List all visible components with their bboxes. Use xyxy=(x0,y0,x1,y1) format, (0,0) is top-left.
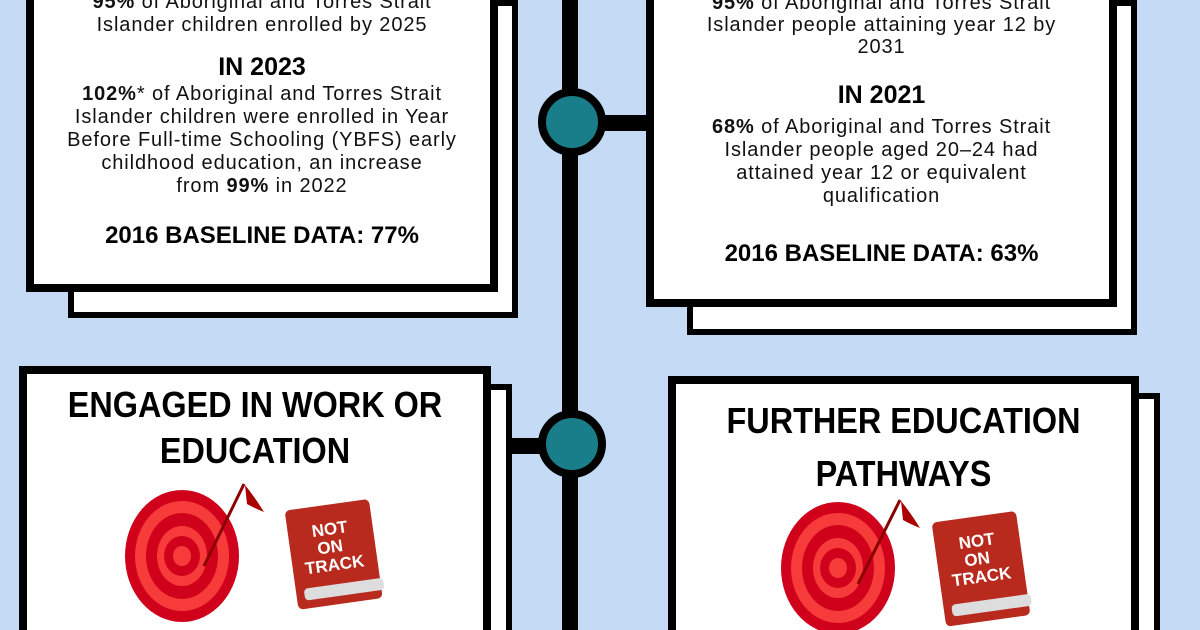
progress text: Islander children were enrolled in Year xyxy=(75,106,449,128)
panel: early childhood enrolment xyxy=(26,0,518,318)
heading: FURTHER EDUCATION xyxy=(727,400,1080,441)
panel: year 12 attainment xyxy=(646,0,1137,335)
panel: engaged in work or education xyxy=(19,366,512,630)
baseline: 2016 BASELINE DATA: 77% xyxy=(105,222,419,249)
progress text: 102%* of Aboriginal and Torres Strait xyxy=(82,83,442,105)
icon: not on track book: NOT xyxy=(958,529,996,553)
connector: top right xyxy=(590,115,660,131)
heading: in 2023: IN 2023 xyxy=(218,53,306,81)
panel: further education pathways xyxy=(668,376,1160,630)
heading: PATHWAYS xyxy=(816,453,991,494)
target text: 2031 xyxy=(857,36,906,58)
progress text: childhood education, an increase xyxy=(101,152,423,174)
icon: not on track book: TRACK xyxy=(951,563,1013,590)
baseline: 2016 BASELINE DATA: 63% xyxy=(725,240,1038,267)
node: top xyxy=(538,88,606,156)
icon: target xyxy=(125,483,264,622)
node: bottom xyxy=(538,410,606,478)
progress text xyxy=(712,116,1051,207)
heading: in 2021: IN 2021 xyxy=(838,81,925,109)
heading xyxy=(727,400,1080,494)
progress text: qualification xyxy=(823,185,940,207)
icon: not on track book: ON xyxy=(963,548,991,570)
timeline vertical line xyxy=(562,0,578,630)
target text: Islander children enrolled by 2025 xyxy=(97,14,427,36)
progress text: Islander people aged 20–24 had xyxy=(725,139,1038,161)
heading xyxy=(68,384,442,471)
icon: not on track book: NOT xyxy=(311,517,349,541)
progress text xyxy=(67,83,457,197)
heading: EDUCATION xyxy=(160,430,350,471)
progress text: 68% of Aboriginal and Torres Strait xyxy=(712,116,1051,138)
icon: target xyxy=(781,499,920,630)
progress text: Before Full-time Schooling (YBFS) early xyxy=(67,129,457,151)
icon: not on track book xyxy=(285,500,384,610)
icon: not on track book: ON xyxy=(316,536,344,558)
progress text: attained year 12 or equivalent xyxy=(736,162,1027,184)
target text xyxy=(92,0,432,36)
icon: not on track book: TRACK xyxy=(304,551,366,578)
heading: ENGAGED IN WORK OR xyxy=(68,384,442,425)
target text xyxy=(707,0,1056,58)
target text: Islander people attaining year 12 by xyxy=(707,14,1056,36)
connector: bottom left xyxy=(500,438,550,454)
icon: not on track book xyxy=(932,512,1032,626)
progress text: from 99% in 2022 xyxy=(176,175,348,197)
